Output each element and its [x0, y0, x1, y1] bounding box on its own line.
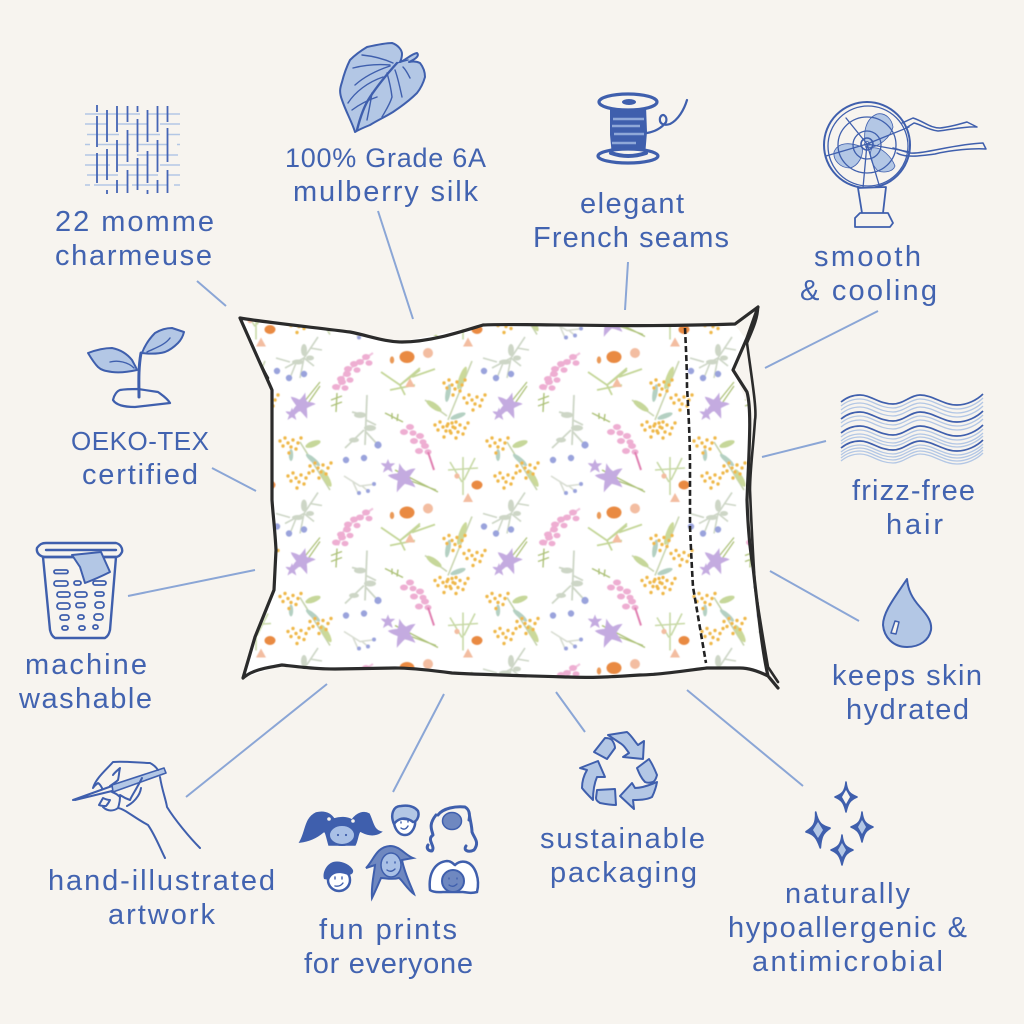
label: smooth & cooling: & cooling	[800, 275, 937, 307]
label: frizz-free hair	[852, 475, 975, 541]
label: machine washable: machine	[25, 649, 147, 681]
label: machine washable	[18, 649, 152, 715]
label: OEKO-TEX certified: OEKO-TEX	[71, 426, 209, 456]
pillow fabric with floral print	[243, 320, 766, 676]
icon: water drop	[883, 579, 931, 647]
pillow illustration	[238, 305, 780, 690]
label: smooth & cooling: smooth	[814, 241, 921, 273]
label: 100% Grade 6A mulberry silk: mulberry silk	[293, 176, 478, 208]
label: frizz-free hair: frizz-free	[852, 475, 975, 507]
label: sustainable packaging: sustainable	[540, 823, 705, 855]
boy with curly hair	[324, 861, 353, 891]
icon: six faces	[300, 806, 478, 898]
label: elegant French seams: French seams	[533, 222, 729, 254]
icon: sparkles	[804, 782, 873, 865]
label: fun prints for everyone: for everyone	[304, 948, 473, 980]
label: naturally hypoallergenic & antimicrobial: antimicrobial	[752, 946, 943, 978]
label: hand-illustrated artwork: hand-illustrated	[48, 865, 275, 897]
label: keeps skin hydrated: keeps skin	[832, 660, 982, 692]
label: sustainable packaging: packaging	[550, 857, 697, 889]
icon: silky waves	[841, 394, 983, 464]
label: hand-illustrated artwork: artwork	[108, 899, 216, 931]
label: keeps skin hydrated: hydrated	[846, 694, 969, 726]
label: machine washable: washable	[18, 683, 152, 715]
label: fun prints for everyone: fun prints	[319, 914, 457, 946]
leader lines	[128, 211, 878, 797]
boy with light hair	[392, 806, 419, 835]
icon: hand drawing with pen	[73, 762, 200, 858]
label: fun prints for everyone	[304, 914, 473, 980]
icon: electric fan	[824, 102, 986, 227]
icon: seedling	[88, 328, 184, 407]
label: OEKO-TEX certified: certified	[82, 459, 198, 491]
icon: recycling arrows	[580, 732, 657, 809]
label: frizz-free hair: hair	[886, 509, 943, 541]
label: 22 momme charmeuse: charmeuse	[55, 240, 212, 272]
pillow outline	[240, 307, 778, 688]
girl with long hair	[366, 846, 414, 898]
label: naturally hypoallergenic & antimicrobial: hypoallergenic &	[728, 912, 967, 944]
label: 100% Grade 6A mulberry silk	[285, 143, 486, 208]
label: 22 momme charmeuse: 22 momme	[55, 206, 214, 238]
label: hand-illustrated artwork	[48, 865, 275, 931]
girl with curly hair	[427, 807, 477, 851]
icon: mulberry leaf	[340, 43, 425, 132]
label: elegant French seams: elegant	[580, 188, 684, 220]
label: elegant French seams	[533, 188, 729, 254]
label: naturally hypoallergenic & antimicrobial: naturally	[785, 878, 910, 910]
French seam stitching	[685, 328, 706, 663]
label: 22 momme charmeuse	[55, 206, 214, 272]
label: smooth & cooling	[800, 241, 937, 307]
icon: laundry basket	[37, 543, 122, 638]
icon: thread spool	[598, 94, 687, 163]
label: OEKO-TEX certified	[71, 426, 209, 491]
label: 100% Grade 6A mulberry silk: 100% Grade 6A	[285, 143, 486, 173]
icon: woven charmeuse	[85, 105, 180, 194]
face with pigtails	[300, 812, 381, 845]
label: keeps skin hydrated	[832, 660, 982, 726]
label: naturally hypoallergenic & antimicrobial	[728, 878, 967, 978]
girl with bob	[430, 861, 478, 893]
label: sustainable packaging	[540, 823, 705, 889]
